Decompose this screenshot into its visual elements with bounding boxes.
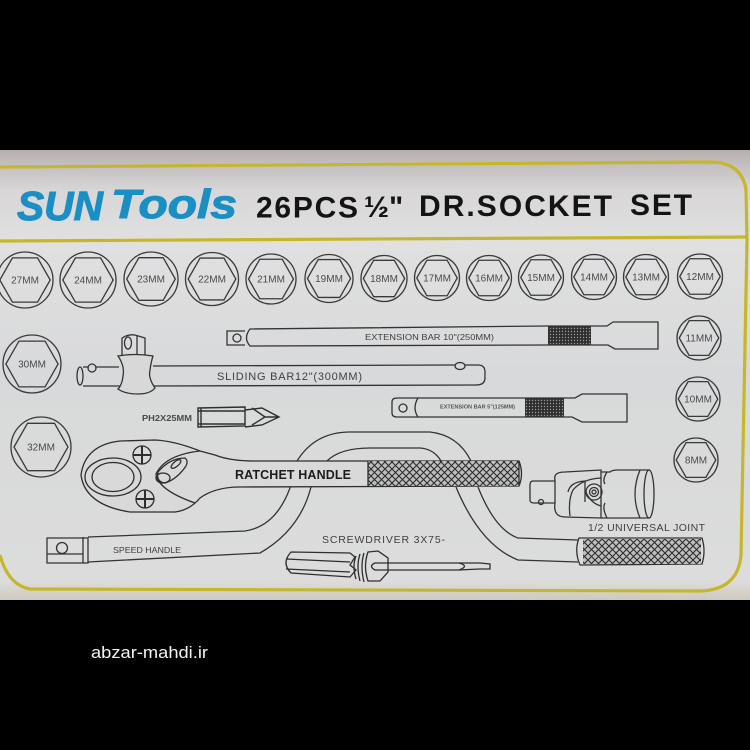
logo: Sun Tools (17, 181, 237, 229)
ratchet handle: RATCHET HANDLE (235, 468, 351, 482)
socket 14MM (572, 254, 616, 300)
socket 8MM: 8MM (685, 456, 707, 466)
socket 19MM (305, 254, 353, 302)
ratchet handle (81, 440, 522, 512)
socket 17MM: 17MM (423, 274, 451, 284)
socket 30MM: 30MM (18, 360, 46, 370)
screwdriver (286, 534, 490, 582)
socket 13MM (624, 254, 668, 300)
socket 23MM: 23MM (137, 274, 165, 286)
title: 26PCS (256, 192, 358, 224)
extension bar 10 inch (227, 322, 658, 349)
title (256, 189, 692, 224)
socket 8MM (674, 438, 718, 482)
socket 23MM (124, 252, 178, 306)
socket 12MM: 12MM (686, 272, 714, 283)
screwdriver: SCREWDRIVER 3X75- (322, 534, 446, 546)
socket 17MM (414, 256, 460, 300)
extension bar 5 inch (392, 394, 627, 422)
socket 21MM: 21MM (257, 274, 285, 286)
socket 19MM: 19MM (315, 274, 343, 285)
extension bar 5 inch: EXTENSION BAR 5"(125MM) (440, 404, 515, 410)
socket 12MM (678, 254, 722, 299)
PH2X25MM bit (142, 407, 279, 427)
universal joint: 1/2 UNIVERSAL JOINT (588, 522, 706, 534)
socket 32MM: 32MM (27, 442, 55, 454)
socket 16MM: 16MM (475, 274, 503, 284)
PH2X25MM bit: PH2X25MM (142, 413, 192, 423)
socket 11MM: 11MM (685, 334, 713, 344)
socket 10MM (676, 377, 720, 421)
socket 18MM: 18MM (370, 274, 398, 285)
speed handle (47, 432, 704, 565)
website caption: abzar-mahdi.ir (91, 643, 208, 662)
sliding bar: SLIDING BAR12"(300MM) (217, 371, 362, 383)
socket 14MM: 14MM (580, 272, 608, 284)
socket 18MM (361, 256, 407, 302)
speed handle: SPEED HANDLE (113, 545, 181, 555)
socket 21MM (246, 254, 296, 304)
universal joint (530, 470, 706, 534)
logo: Sun Tools: SUN (17, 183, 104, 229)
photo of the label card (0, 150, 750, 600)
socket 13MM: 13MM (632, 272, 660, 284)
socket 10MM: 10MM (684, 394, 712, 406)
socket 15MM: 15MM (527, 273, 555, 284)
socket 16MM (466, 256, 512, 300)
logo: Sun Tools: Tools (111, 181, 237, 227)
socket 32MM (11, 417, 71, 477)
sliding bar (77, 335, 485, 394)
socket 27MM: 27MM (11, 276, 39, 286)
socket 22MM (186, 252, 238, 306)
yellow header divider (0, 237, 747, 241)
title: ½" (364, 191, 403, 224)
socket 15MM (518, 255, 564, 300)
socket 11MM (677, 316, 721, 360)
sockets (0, 252, 722, 482)
socket 30MM (3, 335, 61, 393)
title: DR.SOCKET (419, 190, 612, 223)
yellow card border (0, 162, 747, 591)
socket 27MM (0, 252, 53, 308)
socket 24MM: 24MM (74, 276, 102, 286)
socket 22MM: 22MM (198, 274, 226, 286)
title: SET (630, 189, 692, 222)
socket 24MM (60, 252, 116, 308)
extension bar 10 inch: EXTENSION BAR 10"(250MM) (365, 332, 494, 342)
